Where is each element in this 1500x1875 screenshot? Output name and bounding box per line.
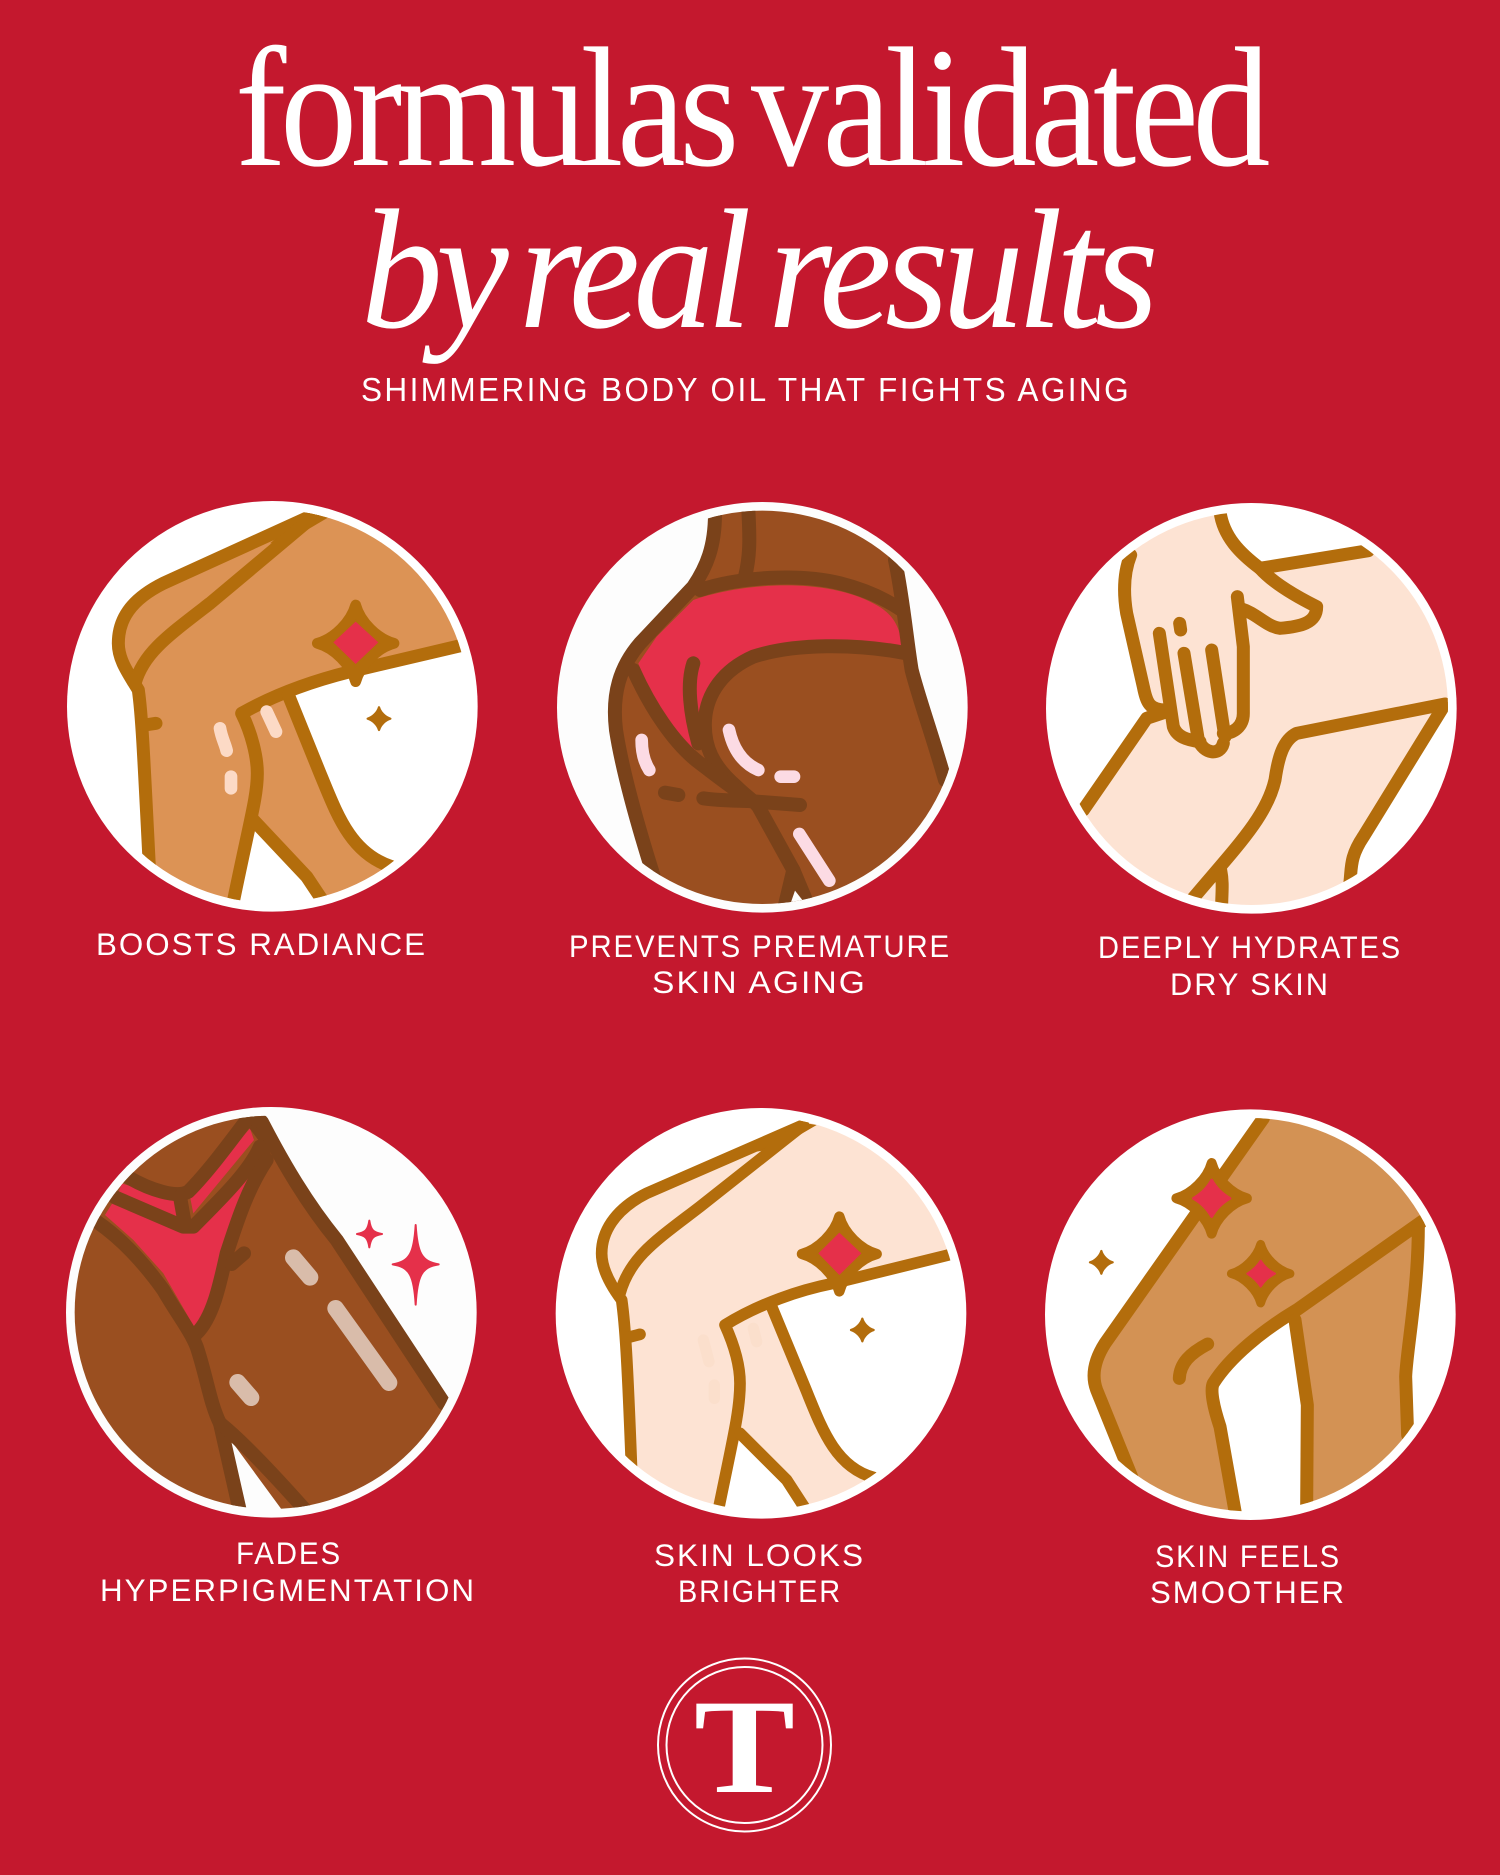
- panel: skin looks brighter: [556, 1108, 980, 1609]
- label: DRY SKIN: [1170, 966, 1330, 1002]
- label: [1150, 1538, 1346, 1610]
- sparkle: small: [1090, 1251, 1113, 1274]
- icon: knee with sparkle, pale skin: [556, 1108, 980, 1530]
- icon: knee with sparkle, tan skin: [67, 501, 490, 920]
- sparkle: small: [368, 707, 390, 730]
- title line 1: validated: [751, 13, 1269, 202]
- icon: hips in red underwear, deep brown skin: [557, 502, 980, 920]
- icon: bikini line, deep brown skin: [66, 1107, 477, 1518]
- sparkle: upper: [1176, 1163, 1247, 1234]
- title line 1: [235, 13, 1269, 202]
- label: [1098, 929, 1402, 1002]
- label: BOOSTS RADIANCE: [96, 926, 427, 962]
- title line 2: results: [768, 175, 1154, 364]
- panel: skin feels smoother: [1045, 1109, 1470, 1610]
- icon: hand on thigh, pale skin: [1046, 503, 1470, 920]
- logo: T monogram: T: [694, 1673, 795, 1822]
- label: HYPERPIGMENTATION: [100, 1572, 476, 1608]
- title: [235, 13, 1269, 364]
- subtitle: SHIMMERING BODY OIL THAT FIGHTS AGING: [361, 371, 1131, 408]
- label: SKIN AGING: [652, 964, 867, 1000]
- icon: bent leg with sparkles, tan skin: [1045, 1109, 1470, 1530]
- sparkle: large: [317, 605, 394, 682]
- label: [100, 1535, 476, 1608]
- title line 2: real: [519, 175, 748, 364]
- panel: prevents premature skin aging: [557, 502, 980, 1000]
- title line 2: [361, 175, 1154, 364]
- label: PREVENTS PREMATURE: [569, 928, 951, 964]
- panel: boosts radiance: [67, 501, 490, 962]
- logo: T monogram: [658, 1658, 831, 1832]
- sparkle: large: [802, 1217, 877, 1291]
- label: [654, 1537, 865, 1609]
- label: SKIN FEELS: [1155, 1538, 1341, 1574]
- sparkle: lower: [1231, 1244, 1290, 1303]
- title line 2: by: [361, 175, 509, 364]
- panel: fades hyperpigmentation: [66, 1107, 477, 1602]
- panel: deeply hydrates dry skin: [1046, 503, 1470, 1002]
- label: DEEPLY HYDRATES: [1098, 929, 1402, 965]
- label: BRIGHTER: [678, 1573, 842, 1609]
- label: [569, 928, 951, 1000]
- title line 1: formulas: [235, 13, 734, 202]
- sparkle: small: [851, 1319, 874, 1341]
- label: FADES: [236, 1535, 342, 1571]
- label: SMOOTHER: [1150, 1574, 1346, 1610]
- label: SKIN LOOKS: [654, 1537, 865, 1573]
- sparkles: red: [357, 1221, 439, 1305]
